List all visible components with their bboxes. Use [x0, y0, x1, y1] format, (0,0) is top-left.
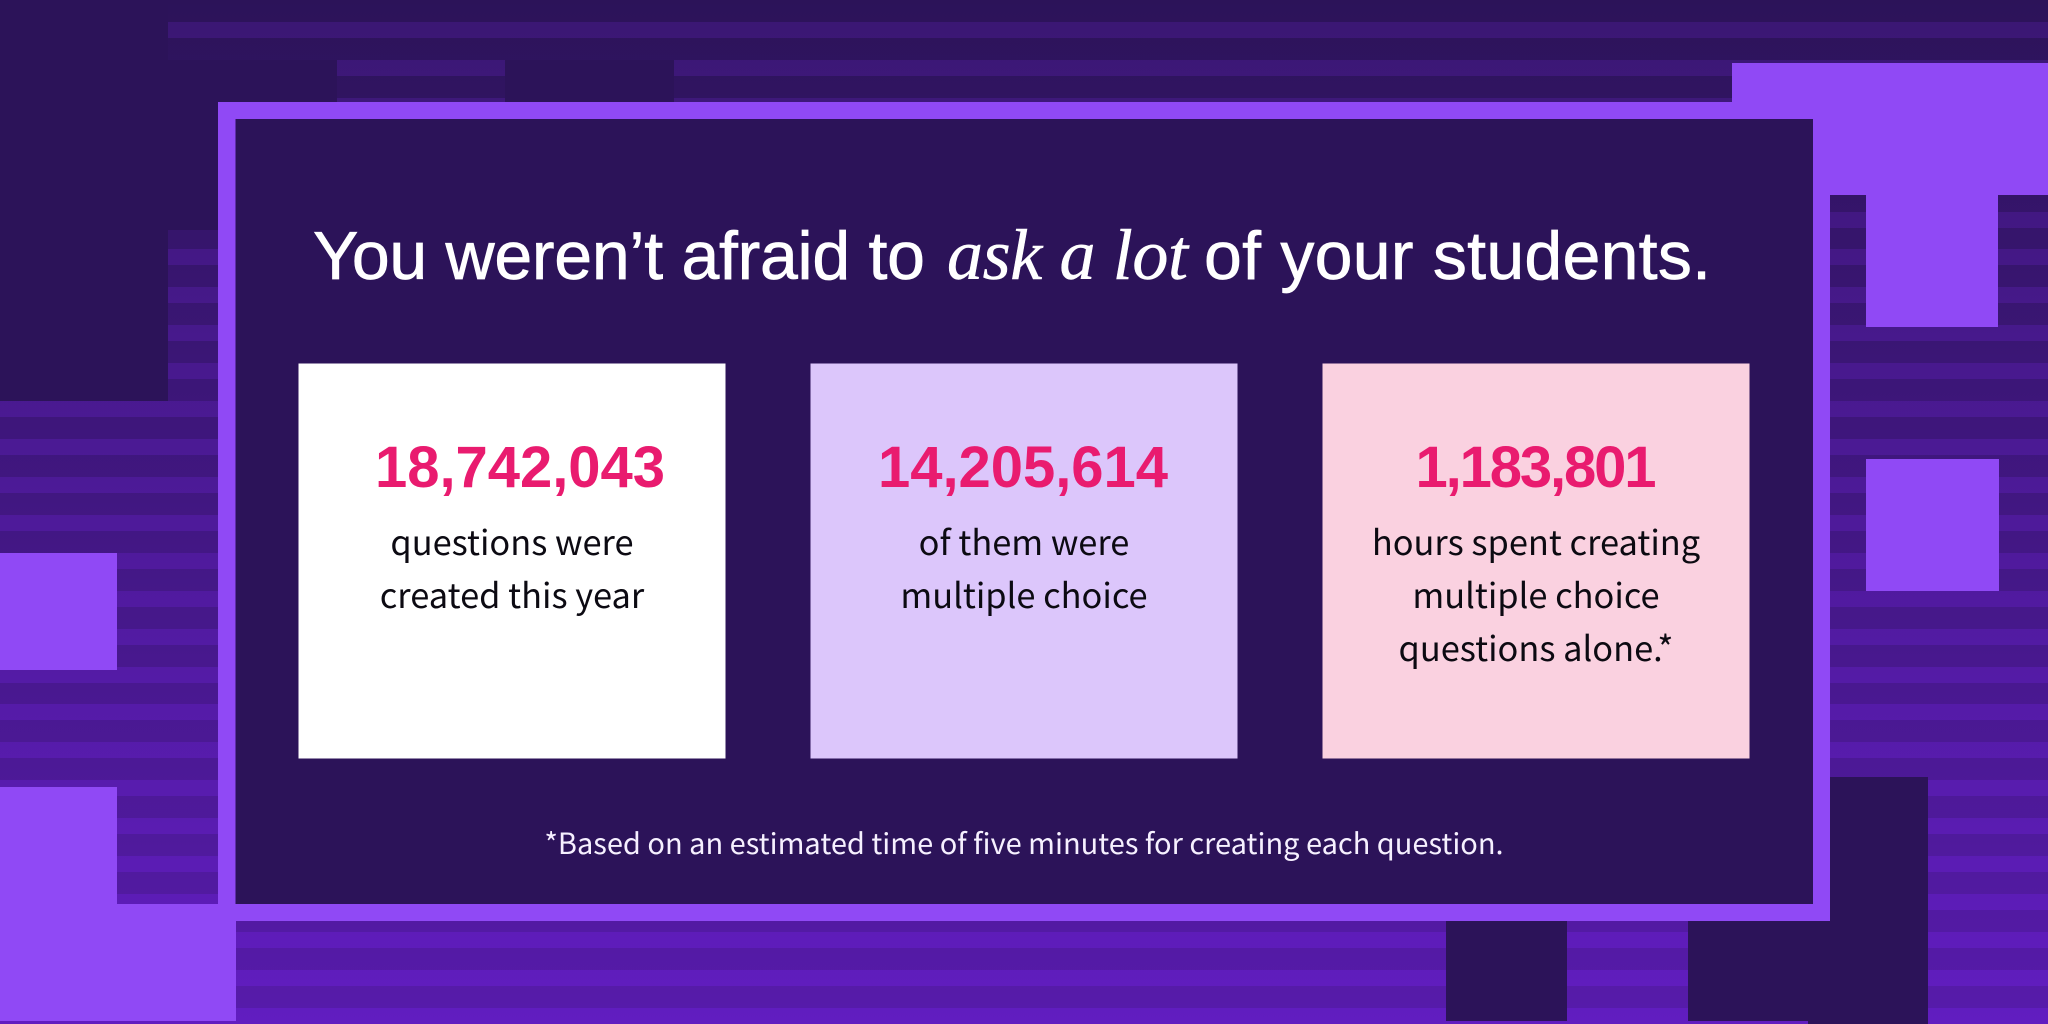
footnote: *Based on an estimated time of five minutes for creating each question.: [544, 821, 1504, 863]
stat card: hours spent: questions alone.*: [1399, 621, 1673, 671]
stat card: hours spent: hours spent creating: [1372, 515, 1700, 565]
title: [313, 215, 1711, 295]
stat card: multiple choice: of them were: [919, 515, 1129, 565]
stat card: multiple choice: 14,205,614: [878, 435, 1168, 500]
stat card: questions created: created this year: [380, 568, 645, 618]
panel: main framed panel: [218, 102, 1830, 921]
stat card: questions created: [298, 364, 726, 758]
stat card: multiple choice: [810, 364, 1238, 758]
stat card: multiple choice: multiple choice: [900, 568, 1148, 618]
title: of your students.: [1204, 218, 1711, 294]
title: ask a lot: [947, 215, 1190, 295]
stat card: questions created: questions were: [390, 515, 634, 565]
stat card: hours spent: multiple choice: [1412, 568, 1660, 618]
title: You weren’t afraid to: [313, 218, 925, 294]
stat card: hours spent: [1322, 364, 1750, 758]
stat card: questions created: 18,742,043: [375, 435, 665, 500]
stat card: hours spent: 1,183,801: [1416, 435, 1656, 500]
